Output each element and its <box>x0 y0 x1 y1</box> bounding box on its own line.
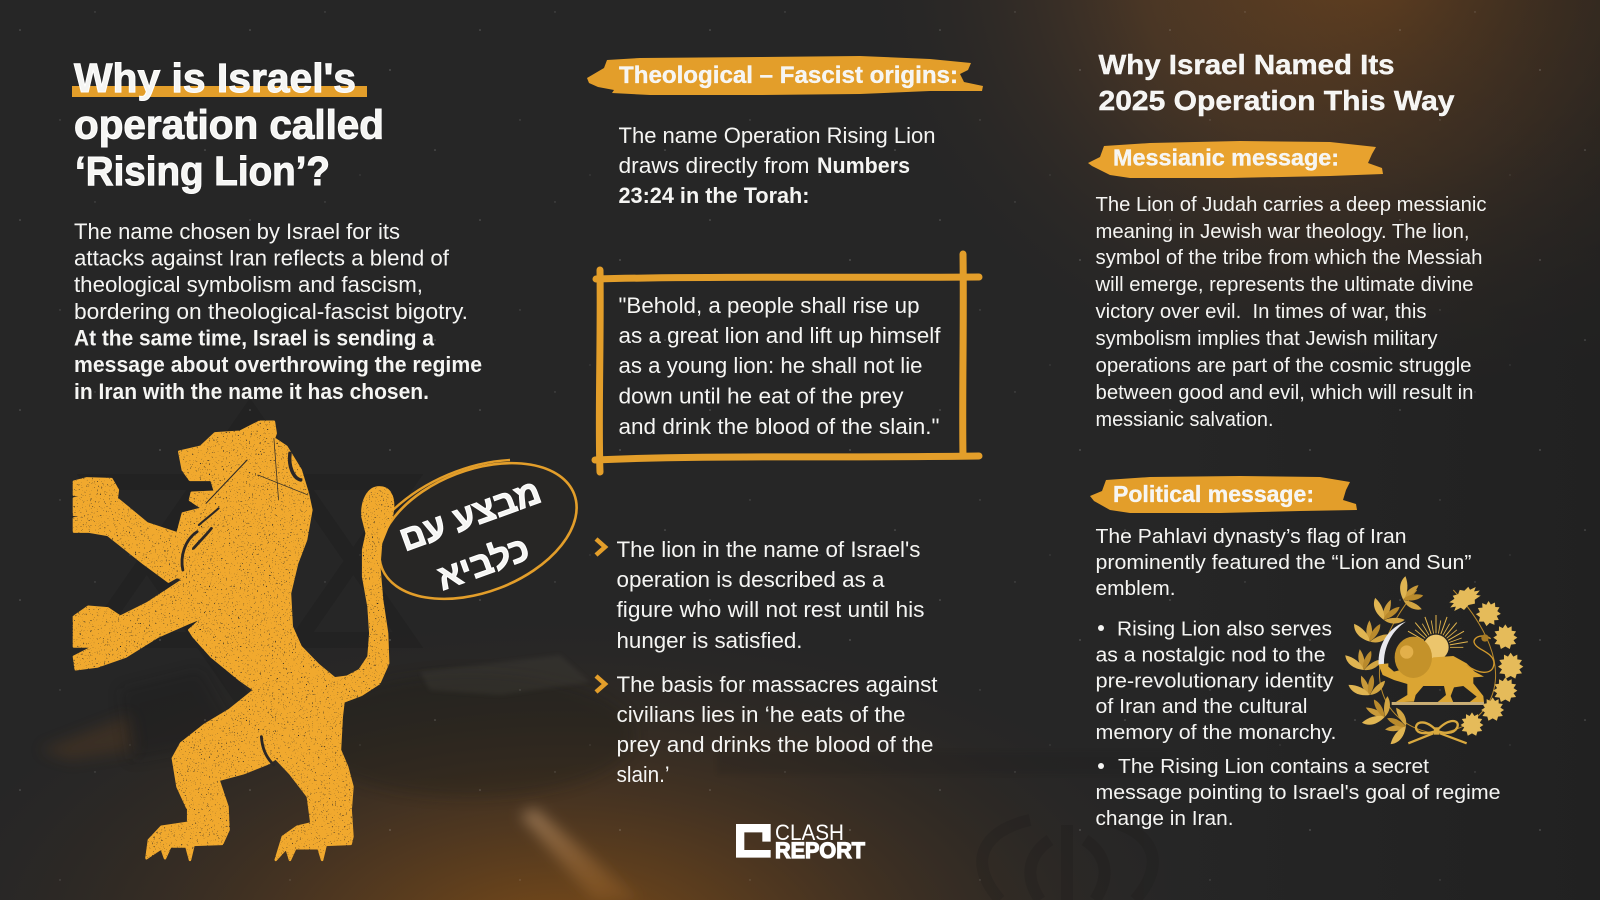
quote box: as a great lion and lift up himself <box>618 323 941 348</box>
speech oval with Hebrew text <box>360 437 596 625</box>
bullet list: figure who will not rest until his <box>616 597 924 622</box>
bullet: nostalgic nod: memory of the monarchy. <box>1096 721 1336 744</box>
Clash Report logo <box>736 820 866 863</box>
title: operation called <box>74 102 384 148</box>
section heading: messianic message: Messianic message: <box>1113 144 1339 170</box>
chevron icon <box>596 676 605 692</box>
political body text: prominently featured the “Lion and Sun” <box>1096 551 1472 574</box>
bullet list: civilians lies in ‘he eats of the <box>616 702 906 727</box>
right column heading: Why Israel Named Its <box>1098 49 1394 80</box>
quote box: and drink the blood of the slain." <box>618 414 940 439</box>
bullet list: The lion in the name of Israel's <box>616 537 920 562</box>
title <box>72 55 384 194</box>
intro paragraph: At the same time, Israel is sending a <box>74 326 435 351</box>
source paragraph: Numbers <box>817 153 910 178</box>
intro paragraph: in Iran with the name it has chosen. <box>74 379 429 404</box>
title: Why is Israel's <box>74 55 356 101</box>
right column heading <box>1098 49 1455 116</box>
quote box: as a young lion: he shall not lie <box>618 353 922 378</box>
source paragraph: draws directly from <box>618 153 810 178</box>
right column heading: 2025 Operation This Way <box>1098 85 1455 116</box>
intro paragraph: bordering on theological-fascist bigotry. <box>74 299 468 324</box>
bullet list: slain.’ <box>616 762 670 787</box>
messianic body text: The Lion of Judah carries a deep messianic <box>1096 193 1486 216</box>
intro paragraph: The name chosen by Israel for its <box>74 219 400 244</box>
messianic body text: will emerge, represents the ultimate divine <box>1095 273 1474 296</box>
Lion and Sun emblem <box>1345 573 1523 744</box>
star of David watermark <box>92 412 408 710</box>
bullet: nostalgic nod: pre-revolutionary identity <box>1096 670 1334 692</box>
section heading: messianic message <box>1088 141 1383 178</box>
section heading: political message <box>1090 476 1357 513</box>
section heading: theological-fascist origins: Theological – Fascist origins: <box>619 62 958 89</box>
messianic body text: between good and evil, which will result in <box>1096 381 1474 404</box>
bullet: regime change: change in Iran. <box>1096 807 1234 830</box>
section heading: theological-fascist origins <box>587 56 983 95</box>
quote box: down until he eat of the prey <box>618 384 904 408</box>
bullet: nostalgic nod: of Iran and the cultural <box>1096 695 1308 718</box>
laurel wreath branch <box>1345 573 1435 744</box>
messianic body text: operations are part of the cosmic struggle <box>1096 354 1472 377</box>
ribbon bow <box>1408 721 1467 743</box>
bullet: regime change: message pointing to Israel's goal of regime <box>1096 781 1500 804</box>
Clash Report logo: CLASH <box>775 820 844 845</box>
hand-drawn frame <box>595 254 979 472</box>
intro paragraph: attacks against Iran reflects a blend of <box>74 246 450 271</box>
bullet list <box>596 537 938 787</box>
title: ‘Rising Lion’? <box>75 148 330 194</box>
bullet list: operation is described as a <box>616 567 885 592</box>
intro paragraph <box>74 219 482 404</box>
messianic body text: symbol of the tribe from which the Messiah <box>1096 246 1482 269</box>
bullet: regime change: The Rising Lion contains a secret <box>1118 755 1429 778</box>
title underline <box>72 86 367 97</box>
bullet: nostalgic nod <box>1096 618 1336 744</box>
section heading: political message: Political message: <box>1113 481 1314 507</box>
lion mane and eye marks <box>182 438 308 765</box>
speech oval with Hebrew text: מבצע עם <box>394 472 546 559</box>
messianic body text: symbolism implies that Jewish military <box>1096 327 1438 350</box>
messianic body text: messianic salvation. <box>1096 408 1274 431</box>
fighter jet silhouette <box>40 655 635 797</box>
source paragraph: 23:24 in the Torah: <box>618 183 810 208</box>
sabre <box>1379 622 1406 665</box>
Iranian flag emblem watermark <box>982 820 1153 900</box>
ground line <box>1392 702 1484 705</box>
Clash Report logo: REPORT <box>775 838 866 863</box>
messianic body text: meaning in Jewish war theology. The lion, <box>1096 220 1470 243</box>
brush stroke <box>1090 476 1357 513</box>
political body text: The Pahlavi dynasty’s flag of Iran <box>1096 525 1406 548</box>
intro paragraph: message about overthrowing the regime <box>74 352 482 377</box>
political body text <box>1096 525 1500 830</box>
brush stroke <box>587 56 983 95</box>
missile flame streak <box>520 808 640 900</box>
messianic body text <box>1095 193 1486 431</box>
intro paragraph: theological symbolism and fascism, <box>74 272 423 297</box>
chevron icon <box>596 539 605 555</box>
messianic body text: victory over evil. In times of war, this <box>1096 300 1426 323</box>
bullet list: The basis for massacres against <box>616 672 938 697</box>
emblem lion <box>1378 634 1494 702</box>
brush stroke <box>1088 141 1383 178</box>
source paragraph <box>618 123 936 208</box>
bullet: nostalgic nod: as a nostalgic nod to the <box>1096 644 1326 666</box>
Persian calligraphy watermark <box>717 752 1167 774</box>
quote box <box>595 254 979 472</box>
speech oval with Hebrew text: כלביא <box>432 529 534 598</box>
lion of Judah illustration <box>74 422 393 860</box>
political body text: emblem. <box>1096 577 1176 600</box>
source paragraph: The name Operation Rising Lion <box>618 123 936 148</box>
bullet: nostalgic nod: Rising Lion also serves <box>1117 618 1332 640</box>
bullet: regime change <box>1096 755 1500 830</box>
bullet list: hunger is satisfied. <box>616 628 802 653</box>
quote box: "Behold, a people shall rise up <box>618 293 920 318</box>
bullet list: prey and drinks the blood of the <box>616 732 934 757</box>
oak wreath branch <box>1438 581 1523 736</box>
sun rays <box>1404 615 1468 653</box>
sun disc <box>1423 635 1449 660</box>
